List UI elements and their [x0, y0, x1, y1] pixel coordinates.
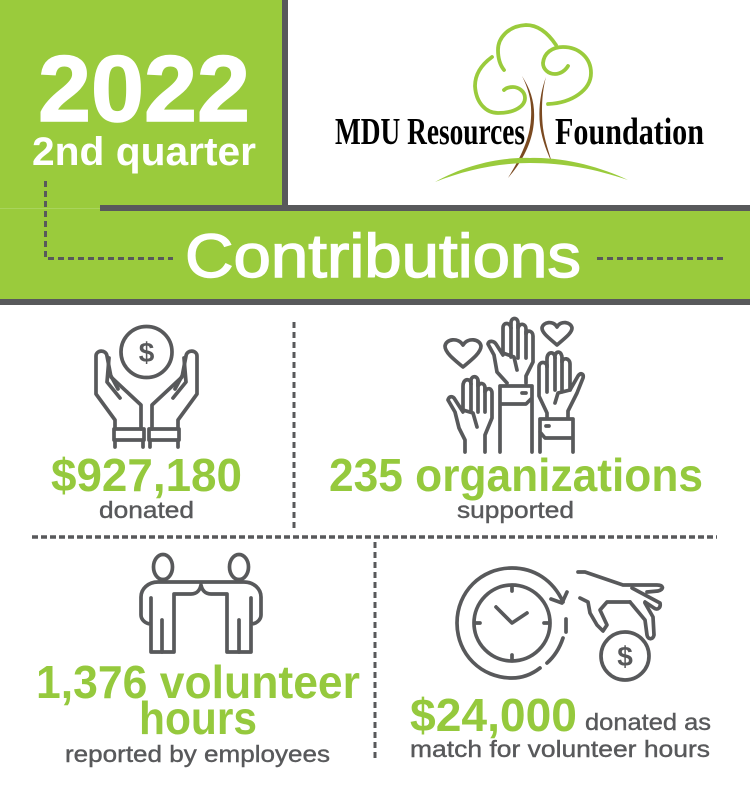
icon: clock with arrow and coin in hand [457, 568, 662, 680]
logo tree trunk [508, 76, 552, 178]
logo wordmark left: MDU Resources [335, 111, 525, 153]
panel: green header block with date [0, 0, 750, 211]
stat: 1,376 volunteer: 1,376 volunteer [36, 656, 360, 708]
title: Contributions [185, 222, 581, 290]
stat: $927,180: $927,180 [51, 449, 242, 501]
label: match for volunteer hours: match for volunteer hours [410, 736, 710, 762]
icon: hands holding coin: $ [139, 337, 155, 368]
panel: matching donation [410, 568, 711, 762]
icon: raised hands and hearts [445, 318, 583, 452]
logo tree crown [475, 25, 591, 113]
logo wordmark right: Foundation [555, 111, 704, 153]
year heading: 2022 [38, 36, 250, 141]
divider: horizontal between rows [32, 535, 717, 539]
logo: MDU Resources Foundation [335, 25, 704, 182]
divider: vertical between bottom stats [374, 542, 376, 762]
panel: contributions title band [0, 211, 750, 305]
label: supported: supported [457, 497, 574, 523]
panel: amount donated [51, 326, 242, 523]
stat: $24,000: $24,000 [410, 689, 577, 741]
label: donated: donated [99, 497, 194, 523]
stat: hours: hours [139, 692, 257, 744]
icon: hands holding coin [96, 326, 197, 447]
quarter subheading: 2nd quarter [32, 130, 256, 174]
label: reported by employees: reported by employees [65, 741, 330, 767]
panel: organizations supported [329, 318, 703, 523]
logo hill [435, 158, 628, 182]
label: donated as: donated as [585, 709, 711, 735]
panel: volunteer hours [36, 554, 360, 767]
icon: clock with arrow and coin in hand: $ [617, 641, 633, 672]
dashed connector left of title [46, 181, 173, 258]
stat: 235 organizations: 235 organizations [329, 449, 703, 501]
icon: two people high five [141, 554, 261, 652]
divider: vertical between top stats [292, 322, 296, 532]
dashed connector right of title [597, 257, 725, 260]
